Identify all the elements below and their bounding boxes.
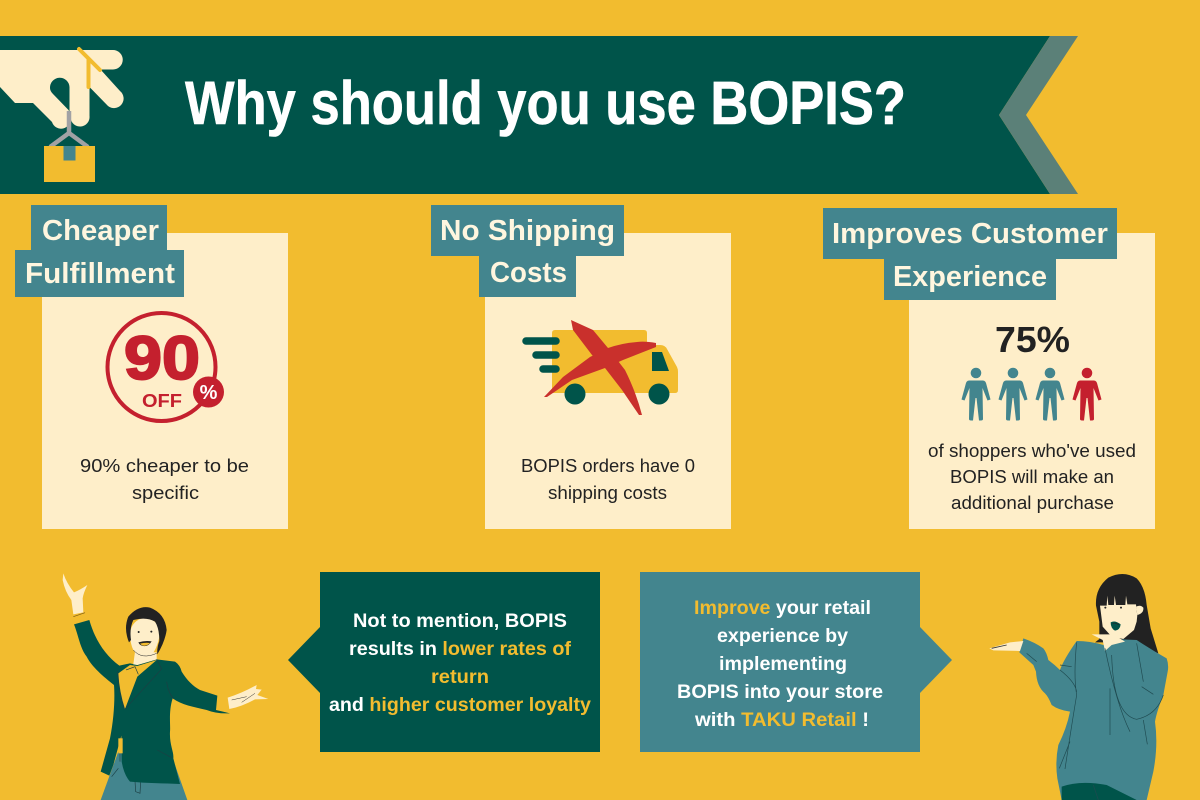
callout: implement BOPIS with TAKU Retail: BOPIS into your store	[677, 682, 883, 703]
callout: implement BOPIS with TAKU Retail: experience by	[717, 626, 848, 647]
heading: no shipping costs	[431, 205, 624, 297]
heading: cheaper fulfillment: Fulfillment	[25, 258, 175, 290]
callout: implement BOPIS with TAKU Retail: implementing	[719, 654, 847, 675]
panel: no shipping costs	[431, 205, 731, 529]
text: shipping detail: shipping costs	[548, 482, 667, 503]
callout: implement BOPIS with TAKU Retail: Improve your retail	[694, 598, 871, 619]
text: shoppers detail: of shoppers who've used	[928, 441, 1136, 461]
text: shoppers detail	[928, 441, 1136, 513]
panel: cheaper fulfillment	[15, 205, 288, 529]
heading: improves customer experience	[823, 208, 1117, 300]
heading: improves customer experience: Experience	[893, 261, 1047, 293]
text: cheaper detail: 90% cheaper to be	[80, 455, 249, 476]
text: shoppers detail: BOPIS will make an	[950, 467, 1114, 487]
heading: improves customer experience: Improves Customer	[832, 218, 1108, 250]
icon: 90 percent off badge: %	[200, 382, 218, 404]
text: cheaper detail	[80, 455, 249, 503]
panel: improves customer experience	[823, 208, 1155, 529]
icon: 90 percent off badge: 90	[124, 324, 200, 392]
illustration: woman gesturing	[989, 574, 1168, 800]
callout: lower returns and loyalty	[288, 572, 600, 752]
banner chevron	[999, 36, 1078, 194]
text: shipping detail: BOPIS orders have 0	[521, 455, 695, 476]
icon: 90 percent off badge	[108, 313, 224, 421]
callout: implement BOPIS with TAKU Retail	[640, 572, 952, 752]
icon: hand holding package	[0, 49, 124, 182]
text: shipping detail	[521, 455, 695, 503]
text: cheaper detail: specific	[132, 482, 199, 503]
heading: no shipping costs: Costs	[490, 257, 567, 289]
title: Why should you use BOPIS?	[185, 69, 906, 137]
heading: cheaper fulfillment	[15, 205, 184, 297]
text: shoppers detail: additional purchase	[951, 493, 1114, 513]
callout: lower returns and loyalty: Not to mention, BOPIS	[353, 611, 567, 632]
statistic: 75 percent: 75%	[995, 319, 1070, 360]
illustration: man gesturing	[63, 573, 268, 800]
icon: 90 percent off badge: OFF	[142, 391, 182, 411]
callout: lower returns and loyalty: and higher customer loyalty	[329, 695, 591, 716]
heading: no shipping costs: No Shipping	[440, 215, 615, 247]
header banner	[0, 36, 1078, 194]
callout: lower returns and loyalty: results in lower rates of	[349, 639, 572, 660]
callout: lower returns and loyalty: return	[431, 667, 489, 688]
callout: implement BOPIS with TAKU Retail: with TAKU Retail !	[694, 710, 869, 731]
icon: crossed-out delivery truck	[526, 320, 678, 415]
icon: four people, one highlighted	[962, 368, 1102, 420]
heading: cheaper fulfillment: Cheaper	[42, 215, 159, 247]
